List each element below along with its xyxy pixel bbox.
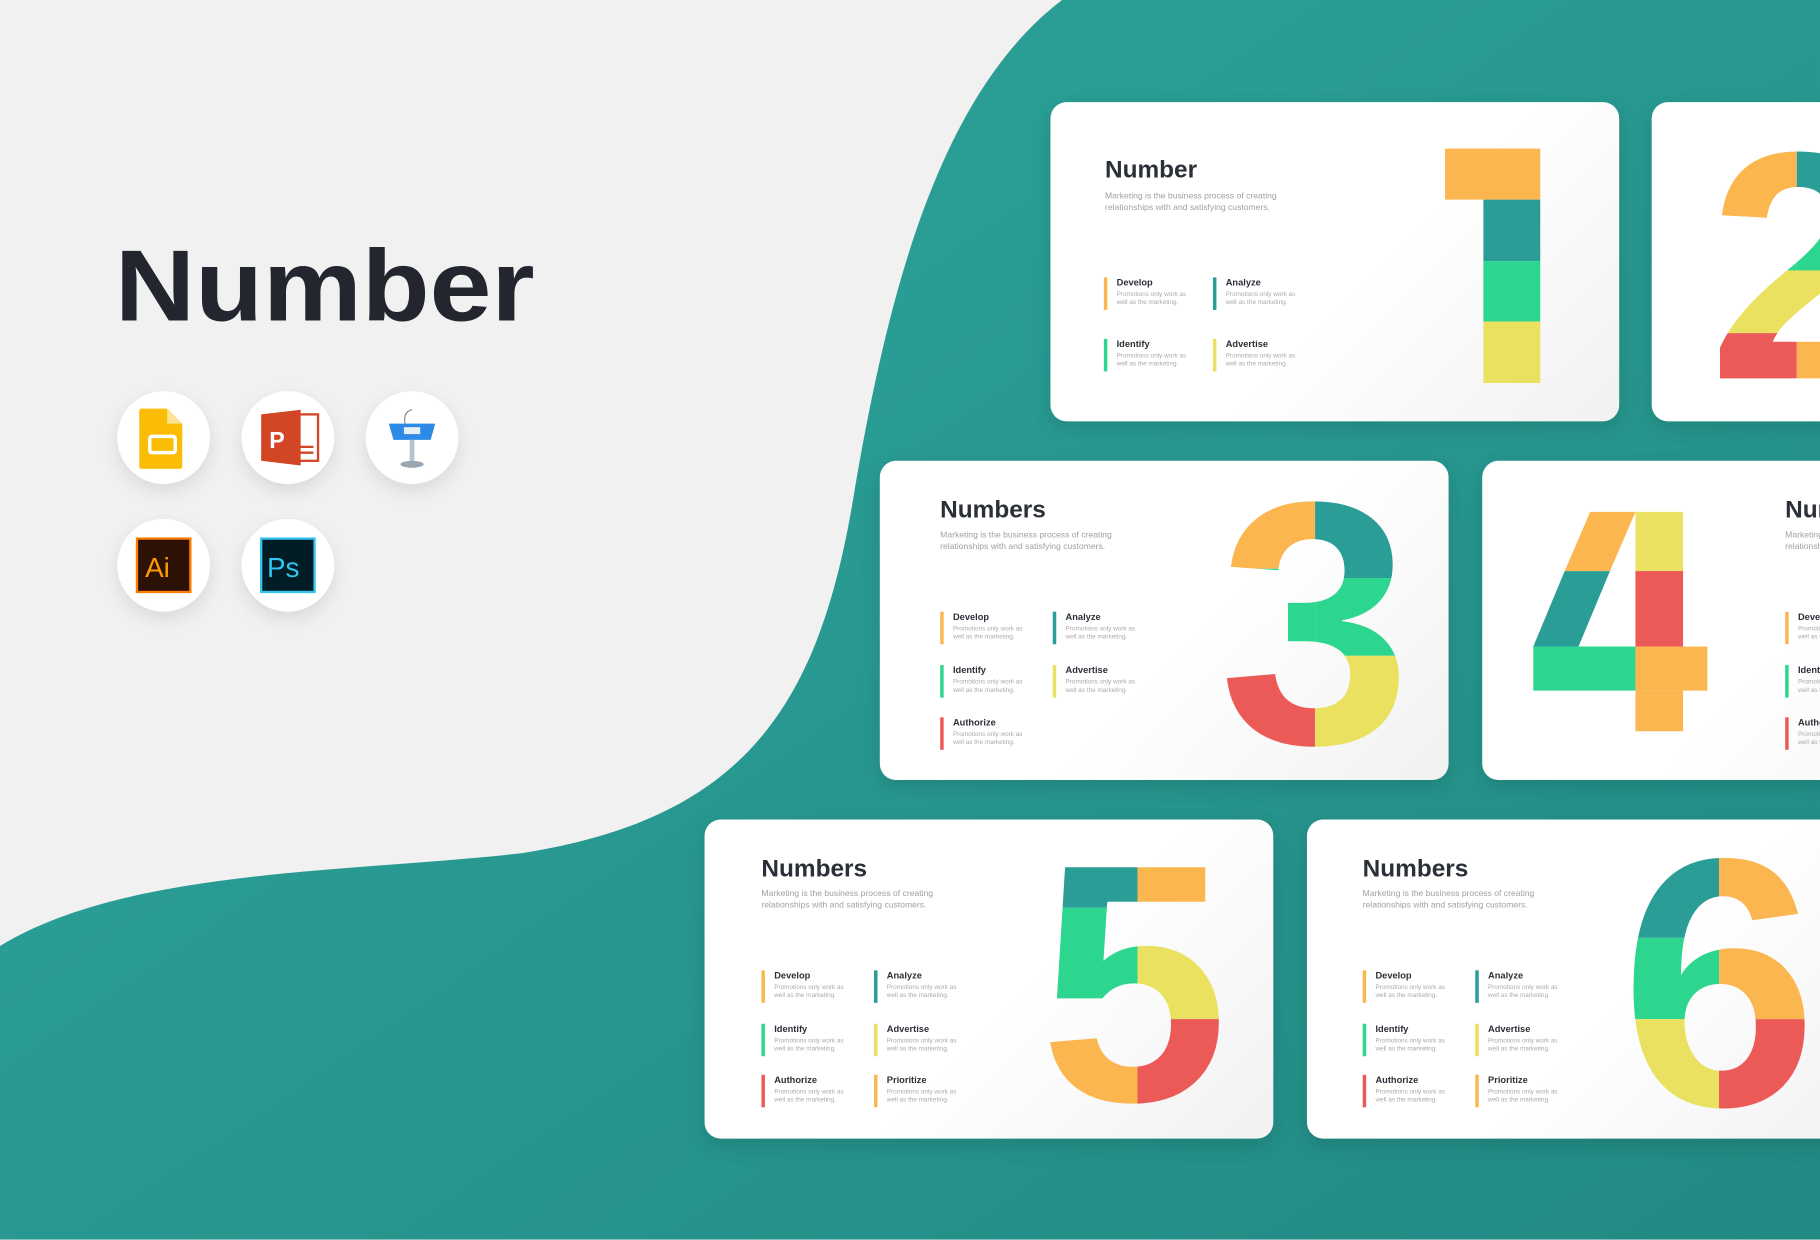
item develop (1104, 277, 1186, 310)
item identify: well as the marketing. (774, 1046, 836, 1053)
card title: Numbers (1363, 855, 1468, 882)
item develop: Promotions only work as (953, 626, 1022, 633)
item advertise (1212, 338, 1296, 372)
item analyze: well as the marketing. (1226, 299, 1287, 306)
card 3: number 3 (880, 461, 1449, 780)
item analyze: Analyze (1226, 277, 1261, 288)
item identify: well as the marketing. (1375, 1046, 1437, 1053)
item identify (1104, 338, 1186, 372)
digit 2 (1720, 152, 1820, 378)
item authorize: Promotions only work as (953, 731, 1022, 738)
item advertise: Promotions only work as (1488, 1038, 1558, 1045)
item develop: Develop (1375, 970, 1412, 981)
card subtitle: Marketing is the business process of creating relationships with and satisfying customers. (1105, 190, 1277, 212)
card subtitle: Marketing is the business process of creating relationships with and satisfying customers. (940, 529, 1112, 551)
item identify (761, 1024, 844, 1056)
item identify: Identify (1375, 1024, 1408, 1034)
main title: Number (115, 230, 535, 342)
item analyze (1052, 612, 1135, 644)
digit 5 (1050, 867, 1219, 1104)
item identify: Promotions only work as (774, 1038, 844, 1045)
item advertise: Promotions only work as (887, 1038, 956, 1045)
item analyze: Promotions only work as (1066, 626, 1135, 633)
icon: photoshop: Ps (267, 552, 299, 583)
item analyze: Promotions only work as (887, 984, 956, 991)
card 2: number 2 (1652, 102, 1820, 421)
item prioritize: Promotions only work as (887, 1089, 956, 1096)
item advertise: well as the marketing. (887, 1046, 949, 1053)
card 1: number 1 (1050, 102, 1619, 421)
item advertise: Advertise (1226, 339, 1268, 349)
item authorize (1785, 717, 1820, 750)
item advertise: well as the marketing. (1226, 361, 1287, 368)
item authorize (1362, 1074, 1445, 1108)
item develop: Promotions only work as (1375, 984, 1445, 991)
item analyze (1475, 970, 1558, 1003)
icon: google slides (117, 391, 210, 484)
item develop: Develop (953, 612, 989, 622)
item develop: Promotions only work as (1117, 291, 1186, 298)
card title: Numbers (761, 855, 867, 882)
item develop: Develop (774, 970, 810, 981)
item develop: well as the marketing. (1375, 992, 1437, 999)
item advertise: well as the marketing. (1066, 687, 1127, 694)
item identify: Identify (953, 665, 986, 676)
item analyze: well as the marketing. (1066, 634, 1127, 641)
item advertise (874, 1024, 956, 1056)
item develop (1785, 612, 1820, 644)
item identify (940, 665, 1022, 698)
item prioritize: Promotions only work as (1488, 1089, 1558, 1096)
item identify: Identify (1117, 339, 1150, 349)
item advertise: Promotions only work as (1066, 679, 1135, 686)
digit 3 (1226, 501, 1399, 747)
card 6: number 6 (1307, 819, 1820, 1139)
item authorize: well as the marketing. (953, 739, 1015, 746)
item develop (940, 612, 1022, 644)
icon: illustrator: Ai (145, 552, 170, 583)
item analyze: Promotions only work as (1488, 984, 1558, 991)
item analyze: well as the marketing. (887, 992, 949, 999)
item identify: well as the marketing. (953, 687, 1015, 694)
icon: powerpoint: P (269, 427, 285, 453)
item authorize: Promotions only work as (1375, 1089, 1445, 1096)
card subtitle: Marketing is the business process of creating relationships with and satisfying customers. (761, 888, 933, 909)
item identify: Promotions only work as (953, 679, 1022, 686)
item analyze: Analyze (887, 970, 922, 981)
item advertise (1052, 665, 1135, 698)
item develop: Develop (1117, 277, 1153, 288)
item advertise: Advertise (1488, 1024, 1530, 1034)
item authorize: Authorize (953, 717, 996, 728)
icon: powerpoint (241, 391, 334, 484)
item develop (1362, 970, 1445, 1003)
item authorize: well as the marketing. (1375, 1097, 1437, 1104)
icon: illustrator (117, 519, 210, 612)
item prioritize (874, 1074, 956, 1108)
item develop: well as the marketing. (774, 992, 836, 999)
item authorize: Authorize (774, 1075, 817, 1085)
card subtitle: Marketing is the business process of creating relationships with and satisfying customers. (1363, 888, 1534, 909)
icon: keynote (366, 391, 458, 484)
item advertise: Promotions only work as (1226, 353, 1295, 360)
item analyze: well as the marketing. (1488, 992, 1550, 999)
card title: Number (1105, 157, 1197, 183)
item authorize: well as the marketing. (774, 1097, 836, 1104)
item advertise (1475, 1024, 1558, 1056)
item analyze: Analyze (1066, 612, 1101, 622)
item prioritize: Prioritize (1488, 1075, 1528, 1085)
item authorize: Promotions only work as (774, 1089, 844, 1096)
item identify (1362, 1024, 1445, 1056)
digit 1 (1445, 148, 1540, 384)
item authorize: Authorize (1375, 1075, 1418, 1085)
item prioritize: well as the marketing. (1488, 1097, 1550, 1104)
digit 4 (1533, 512, 1708, 732)
icon: photoshop (241, 519, 334, 612)
card 5: number 5 (705, 819, 1273, 1139)
item develop: well as the marketing. (1117, 299, 1178, 306)
item identify: well as the marketing. (1117, 361, 1178, 368)
item develop: well as the marketing. (953, 634, 1015, 641)
item analyze (874, 970, 956, 1003)
digit 6 (1634, 858, 1805, 1108)
item analyze: Analyze (1488, 970, 1523, 981)
card 4: number 4 (1482, 461, 1820, 780)
item analyze: Promotions only work as (1226, 291, 1295, 298)
item advertise: Advertise (887, 1024, 929, 1034)
item identify: Promotions only work as (1117, 353, 1186, 360)
item prioritize (1475, 1074, 1558, 1108)
item advertise: Advertise (1066, 665, 1108, 676)
item identify: Identify (774, 1024, 807, 1034)
item identify (1785, 665, 1820, 698)
item prioritize: well as the marketing. (887, 1097, 949, 1104)
item analyze (1212, 277, 1296, 310)
item authorize (761, 1074, 844, 1108)
item authorize (940, 717, 1022, 750)
item advertise: well as the marketing. (1488, 1046, 1550, 1053)
item develop (761, 970, 844, 1003)
item develop: Promotions only work as (774, 984, 844, 991)
item identify: Promotions only work as (1375, 1038, 1445, 1045)
card title: Numbers (940, 497, 1046, 523)
item prioritize: Prioritize (887, 1075, 927, 1085)
